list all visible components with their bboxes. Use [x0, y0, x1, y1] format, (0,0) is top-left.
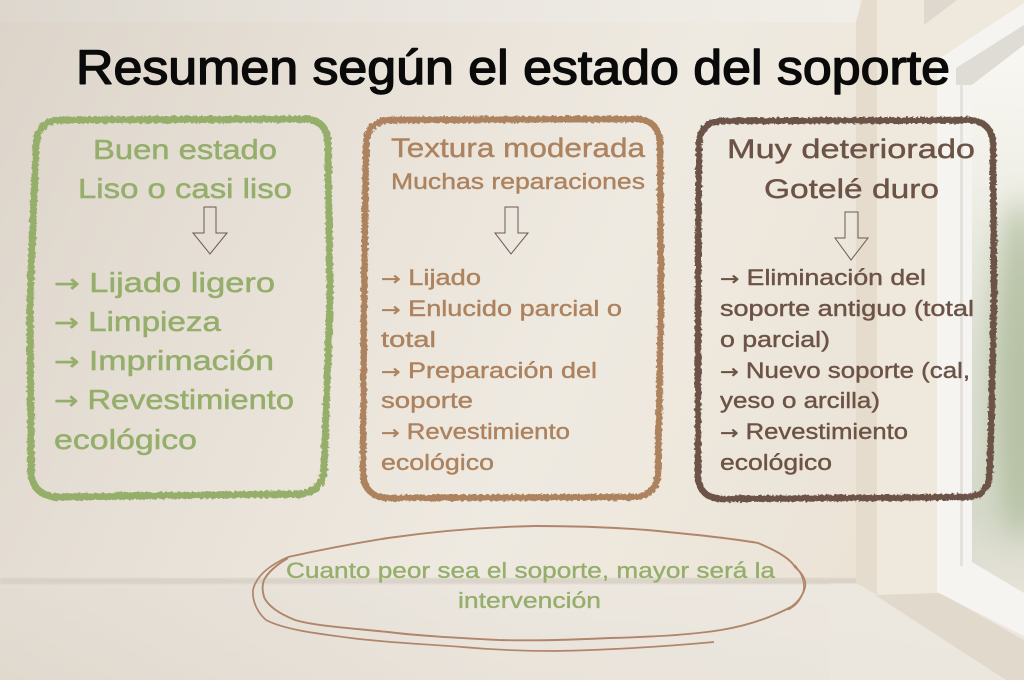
list: buen estado steps: → Limpieza	[54, 306, 221, 337]
list: textura moderada steps: → Preparación del	[381, 358, 597, 383]
callout: hand-drawn ellipse	[253, 526, 805, 651]
list: muy deteriorado steps: o parcial)	[720, 327, 830, 352]
list: muy deteriorado steps: → Eliminación del	[720, 265, 926, 290]
heading: muy deteriorado: Gotelé duro	[764, 174, 939, 204]
heading: textura moderada: Muchas reparaciones	[391, 169, 645, 194]
arrow: down	[835, 212, 868, 260]
list: textura moderada steps: total	[381, 327, 436, 352]
panel border: dark brown	[698, 120, 994, 499]
panel: muy deteriorado	[698, 120, 994, 499]
arrow: down	[193, 207, 227, 254]
list: buen estado steps: → Imprimación	[54, 345, 274, 376]
list: muy deteriorado steps: → Nuevo soporte (cal,	[720, 358, 970, 383]
list: muy deteriorado steps: soporte antiguo (total	[720, 296, 974, 321]
panel: buen estado	[30, 119, 330, 497]
list: textura moderada steps	[381, 265, 622, 475]
heading: buen estado: Liso o casi liso	[78, 173, 292, 204]
list: buen estado steps: ecológico	[54, 424, 197, 455]
title: Resumen según el estado del soporte	[76, 42, 950, 95]
heading: textura moderada	[391, 133, 646, 194]
panel border: brown	[363, 119, 661, 498]
list: textura moderada steps: → Revestimiento	[381, 419, 570, 444]
panel: textura moderada	[363, 119, 661, 498]
list: textura moderada steps: soporte	[381, 388, 473, 413]
list: textura moderada steps: → Enlucido parcial o	[381, 296, 622, 321]
callout: conclusion: intervención	[458, 588, 601, 613]
panel border: green	[30, 119, 330, 497]
list: muy deteriorado steps	[720, 265, 974, 475]
heading: textura moderada: Textura moderada	[391, 133, 646, 163]
list: buen estado steps: → Revestimiento	[54, 384, 294, 415]
list: buen estado steps	[54, 267, 294, 455]
list: muy deteriorado steps: yeso o arcilla)	[720, 388, 880, 413]
list: muy deteriorado steps: → Revestimiento	[720, 419, 908, 444]
list: muy deteriorado steps: ecológico	[720, 450, 832, 475]
callout: conclusion	[253, 526, 805, 651]
callout text: Cuanto peor sea el soporte, mayor será la	[286, 558, 776, 583]
arrow: down	[495, 207, 528, 254]
heading: buen estado	[78, 134, 292, 204]
heading: muy deteriorado: Muy deteriorado	[727, 134, 975, 164]
heading: buen estado: Buen estado	[93, 134, 277, 165]
list: buen estado steps: → Lijado ligero	[54, 267, 275, 298]
heading: muy deteriorado	[727, 134, 975, 204]
list: textura moderada steps: → Lijado	[381, 265, 481, 290]
list: textura moderada steps: ecológico	[381, 450, 494, 475]
